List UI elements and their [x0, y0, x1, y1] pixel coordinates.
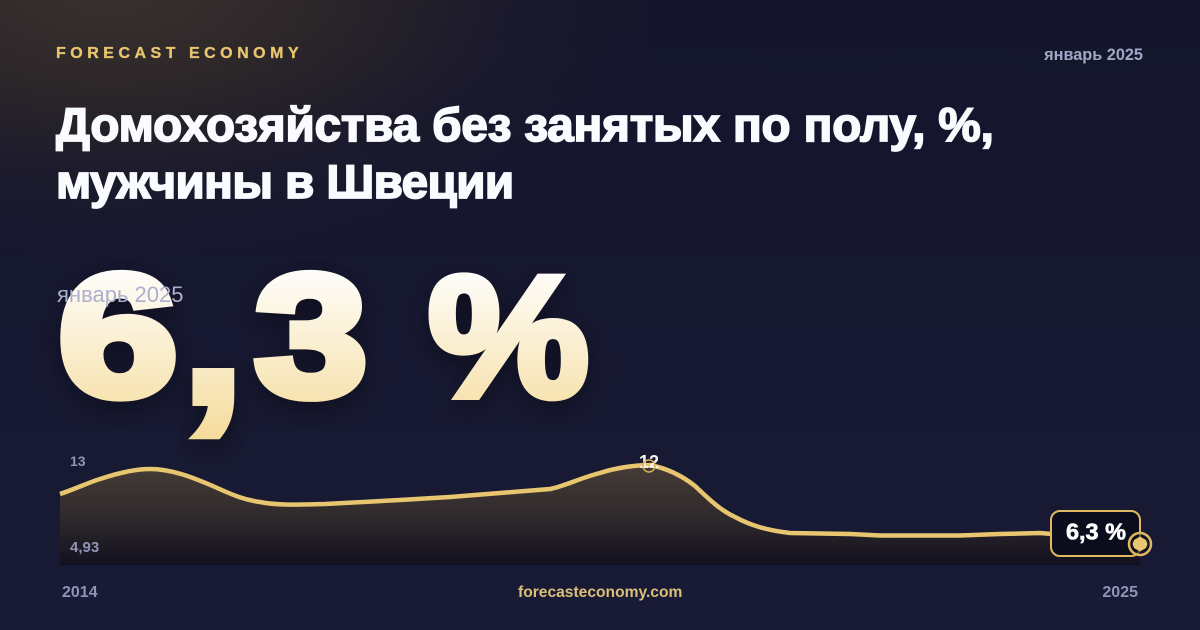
max marker label: 12	[639, 452, 659, 472]
value callout	[1051, 511, 1140, 556]
title: Домохозяйства без занятых по полу, %,	[56, 99, 994, 152]
subtitle date over value: январь 2025	[57, 282, 184, 307]
axis max label: 13	[70, 453, 86, 469]
axis min label: 4,93	[70, 539, 99, 556]
end point marker	[1129, 533, 1151, 555]
area fill	[60, 465, 1140, 565]
footer site: forecasteconomy.com	[518, 584, 682, 601]
line	[60, 465, 1052, 536]
big value: ,	[179, 209, 247, 449]
brand label: FORECAST ECONOMY	[56, 44, 303, 62]
title: мужчины в Швеции	[56, 156, 514, 209]
big value: %	[428, 241, 589, 433]
axis end year: 2025	[1102, 584, 1138, 601]
axis start year: 2014	[62, 584, 98, 601]
big value: 6	[59, 241, 177, 432]
big value: 3	[255, 240, 367, 432]
date top right: январь 2025	[1044, 46, 1143, 64]
title	[56, 99, 994, 209]
value callout: 6,3 %	[1066, 518, 1126, 544]
